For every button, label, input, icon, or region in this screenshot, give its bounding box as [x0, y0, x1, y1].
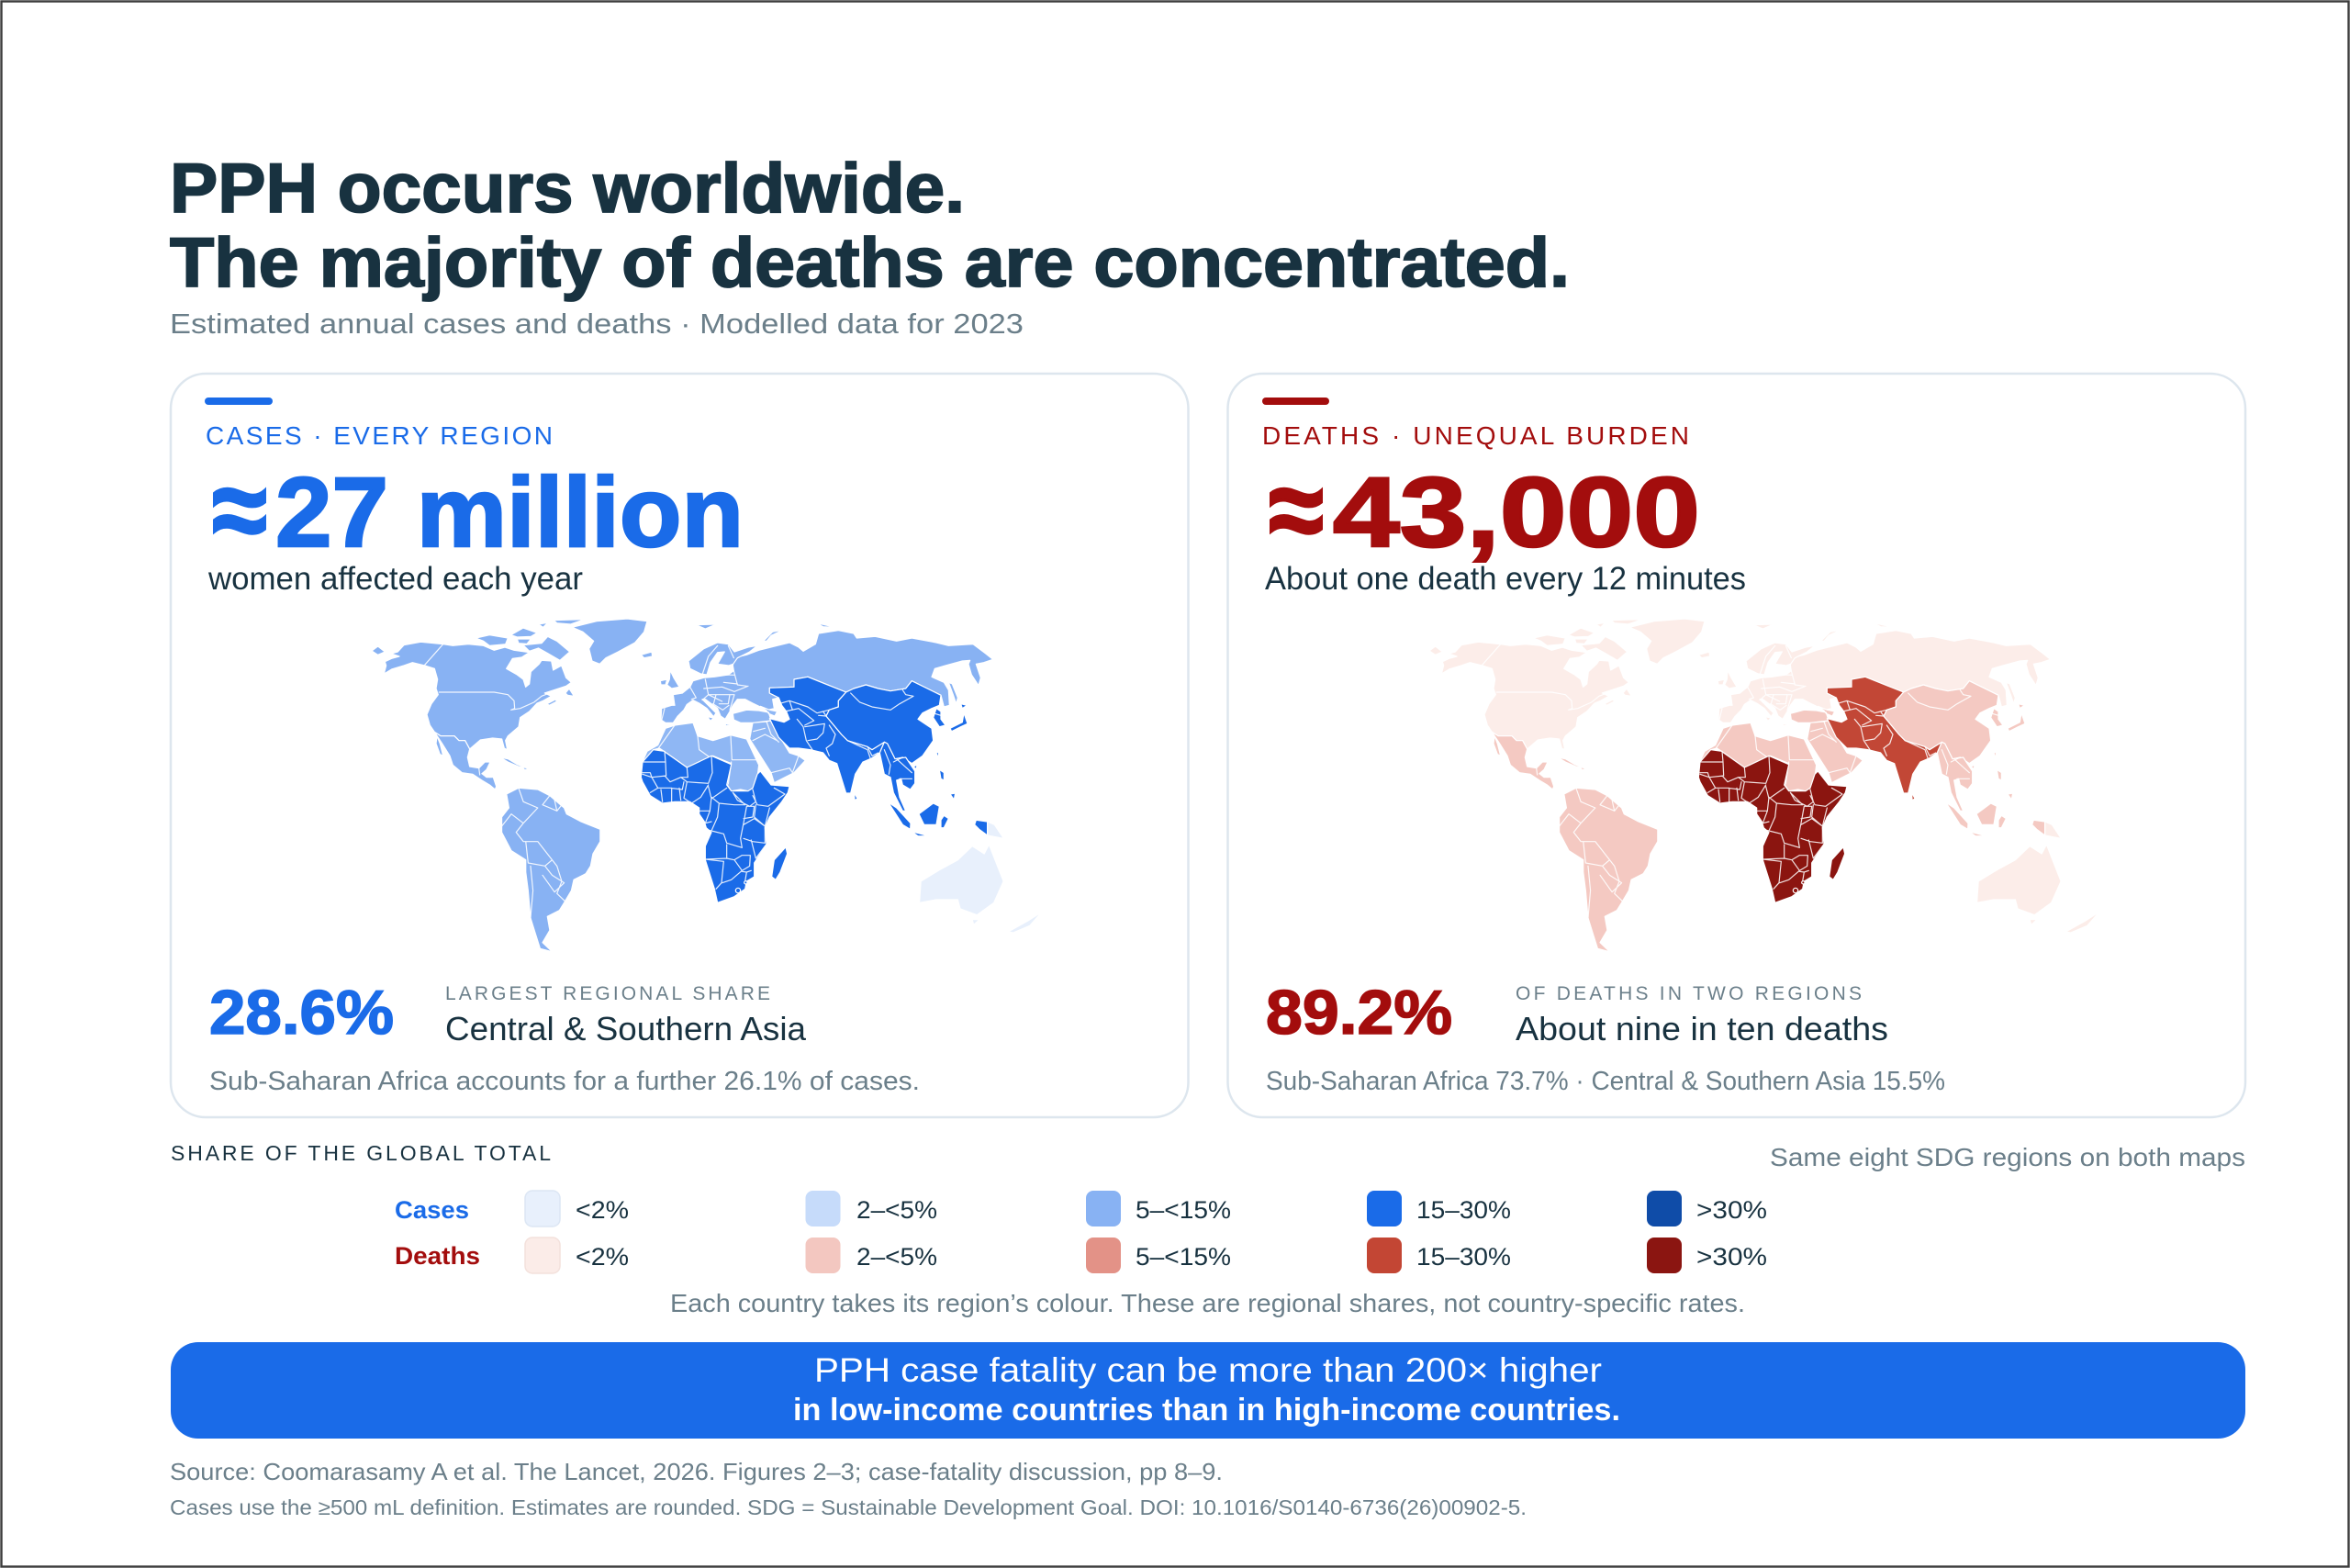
big number: deaths: ≈	[1269, 446, 1324, 574]
subtitle: Estimated annual cases and deaths · Modelled data for 2023	[170, 308, 1024, 340]
Northern Africa	[643, 722, 759, 791]
panel label: cases: CASES · EVERY REGION	[206, 421, 553, 450]
legend: cases row: Cases	[395, 1196, 469, 1224]
map: deaths	[1429, 619, 2099, 952]
stat label: deaths: OF DEATHS IN TWO REGIONS	[1516, 983, 1862, 1004]
Europe and Russia	[660, 622, 993, 726]
stat label: cases: LARGEST REGIONAL SHARE	[445, 983, 770, 1004]
legend: cases row	[395, 1191, 1767, 1226]
legend note: same regions: Same eight SDG regions on both maps	[1770, 1143, 2245, 1171]
legend heading: SHARE OF THE GLOBAL TOTAL	[171, 1141, 551, 1165]
legend: cases row: 15–30%	[1416, 1196, 1511, 1224]
stat: two-region share: 89.2%	[1266, 978, 1452, 1047]
legend: deaths row: <2%	[576, 1243, 629, 1271]
legend: cases row: 2–<5%	[856, 1196, 937, 1224]
South America	[502, 788, 600, 952]
legend: deaths row	[395, 1238, 1767, 1273]
Sub-Saharan Africa	[641, 750, 789, 902]
legend: deaths row: Deaths	[395, 1242, 480, 1270]
big number: deaths: 43,000	[1333, 456, 1700, 567]
accent bar: deaths	[1262, 398, 1329, 405]
legend: cases row: 5–<15%	[1136, 1196, 1231, 1224]
big number caption: deaths: About one death every 12 minutes	[1265, 561, 1746, 597]
big number caption: cases: women affected each year	[207, 561, 583, 597]
big number: deaths	[1269, 446, 1700, 574]
accent bar: cases	[205, 398, 273, 405]
stat region name: Central & Southern Asia	[445, 1010, 807, 1047]
stat: largest regional share: 28.6%	[209, 978, 394, 1047]
map: cases	[372, 619, 1042, 952]
legend: cases row: <2%	[576, 1196, 629, 1224]
title: The majority of deaths are concentrated.	[170, 224, 1570, 302]
stat headline: deaths: About nine in ten deaths	[1516, 1010, 1888, 1047]
legend: cases row: >30%	[1696, 1196, 1767, 1224]
legend footnote: Each country takes its region’s colour. These are regional shares, not country-specific rates.	[670, 1289, 1745, 1317]
callout banner: PPH case fatality can be more than 200× higher	[814, 1351, 1602, 1389]
panel: deaths	[1228, 374, 2245, 1117]
North America	[372, 619, 653, 790]
panel label: deaths: DEATHS · UNEQUAL BURDEN	[1262, 421, 1689, 450]
footnote: Cases use the ≥500 mL definition. Estimates are rounded. SDG = Sustainable Development Goal. DOI: 10.1016/S0140-6736(26)00902-5.	[170, 1495, 1527, 1519]
big number: cases: ≈	[212, 446, 267, 574]
title: PPH occurs worldwide.	[170, 150, 965, 228]
legend: deaths row: 15–30%	[1416, 1243, 1511, 1271]
legend: deaths row: 5–<15%	[1136, 1243, 1231, 1271]
stat note: deaths: Sub-Saharan Africa 73.7% · Central & Southern Asia 15.5%	[1266, 1067, 1945, 1096]
big number: cases: 27 million	[275, 456, 744, 567]
legend: deaths row: >30%	[1696, 1243, 1767, 1271]
Australia and New Zealand	[920, 845, 1042, 933]
title	[170, 150, 1570, 302]
Western Asia, Central and Southern Asia, Eastern and South-Eastern Asia	[733, 677, 1003, 838]
stat note: cases: Sub-Saharan Africa accounts for a further 26.1% of cases.	[209, 1067, 920, 1096]
callout banner: in low-income countries than in high-income countries.	[793, 1393, 1620, 1428]
source line: Source: Coomarasamy A et al. The Lancet, 2026. Figures 2–3; case-fatality discussion, pp 8–9.	[170, 1458, 1223, 1485]
legend: deaths row: 2–<5%	[856, 1243, 937, 1271]
panel: cases	[171, 374, 1188, 1117]
callout banner	[171, 1342, 2245, 1439]
